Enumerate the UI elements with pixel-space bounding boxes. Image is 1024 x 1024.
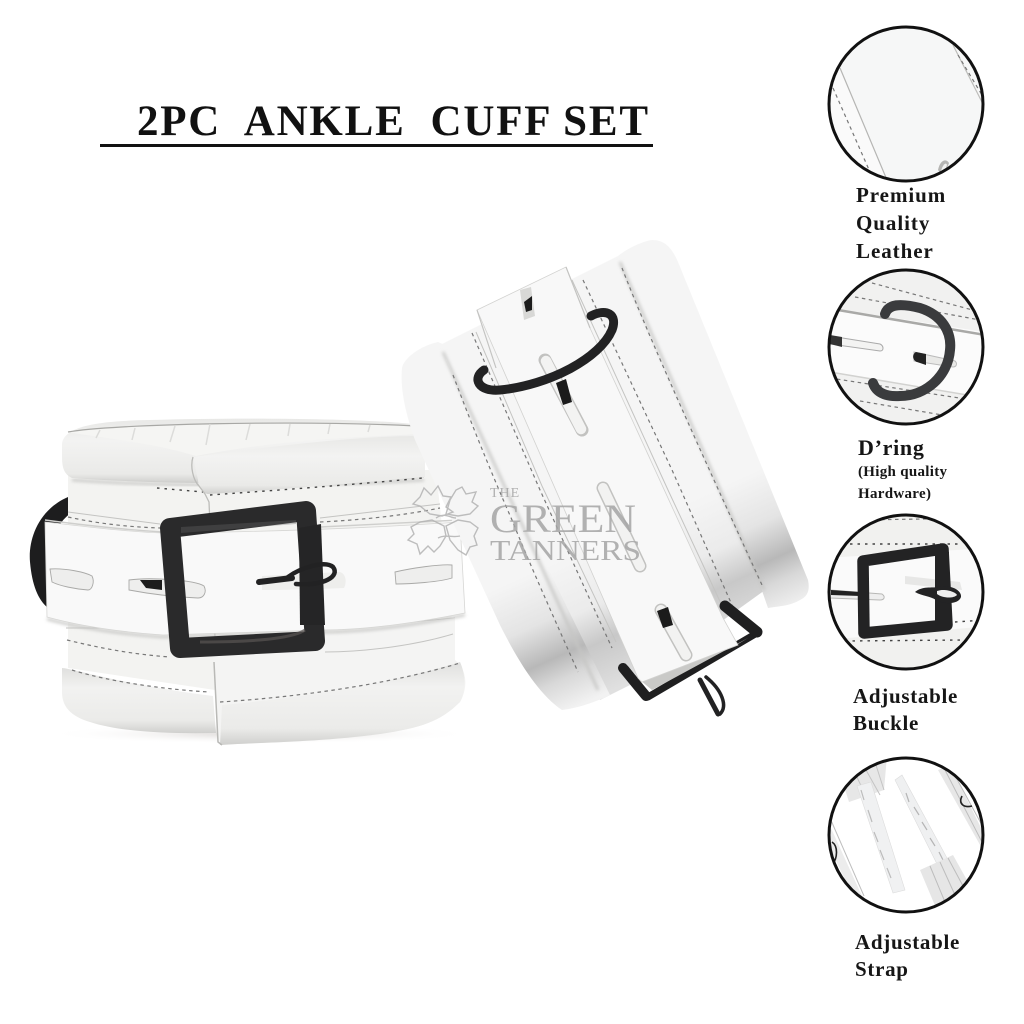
label: Adjustable bbox=[853, 684, 958, 708]
cuff body bbox=[440, 255, 765, 700]
left ankle cuff bbox=[30, 419, 475, 745]
detail: premium quality leather bbox=[825, 25, 985, 263]
bottom left roll bbox=[62, 668, 216, 733]
circle: leather close-up bbox=[825, 25, 985, 185]
cuff body bbox=[68, 470, 455, 690]
watermark text: TANNERS bbox=[490, 536, 641, 567]
label: Adjustable bbox=[855, 930, 960, 954]
label: Quality bbox=[856, 211, 930, 235]
detail: adjustable strap bbox=[825, 754, 990, 981]
strap slots bbox=[520, 287, 686, 655]
strap bar and buckle bbox=[623, 606, 757, 714]
buckle tongue bbox=[259, 564, 335, 584]
D-ring bbox=[478, 312, 614, 390]
label: Buckle bbox=[853, 711, 919, 735]
label: (High quality bbox=[858, 464, 948, 480]
watermark text: GREEN bbox=[490, 496, 636, 541]
circle: strap close-up bbox=[825, 754, 990, 914]
right roll bbox=[618, 240, 809, 608]
watermark bbox=[408, 486, 641, 567]
label: Hardware) bbox=[858, 486, 931, 502]
left roll bbox=[402, 342, 610, 710]
circle: D-ring close-up bbox=[825, 268, 985, 428]
title: 2PC ANKLE CUFF SET bbox=[137, 98, 648, 145]
label: Leather bbox=[856, 239, 934, 263]
detail: D-ring bbox=[825, 268, 985, 502]
watermark text bbox=[490, 486, 641, 567]
flap roll bbox=[193, 436, 425, 494]
label: D’ring bbox=[858, 435, 925, 460]
lower body stitching bbox=[66, 618, 455, 658]
upper body stitching bbox=[68, 488, 440, 528]
bottom flap and strap end bbox=[213, 618, 465, 745]
label: Premium bbox=[856, 183, 946, 207]
back D-ring bbox=[30, 497, 72, 608]
right ankle cuff bbox=[402, 240, 809, 714]
watermark text: THE bbox=[490, 486, 520, 501]
buckle bbox=[170, 511, 335, 648]
strap slots bbox=[50, 565, 452, 598]
seam and stitching lines bbox=[443, 262, 764, 690]
buckle tongue bbox=[700, 677, 724, 714]
top roll with lining bbox=[62, 419, 424, 485]
watermark leaf emblem bbox=[408, 486, 478, 555]
center strap bbox=[477, 267, 738, 682]
label: Strap bbox=[855, 957, 909, 981]
circle: buckle close-up bbox=[825, 512, 990, 672]
belt strap bbox=[47, 615, 465, 637]
detail: adjustable buckle bbox=[825, 512, 990, 735]
label bbox=[858, 435, 948, 502]
